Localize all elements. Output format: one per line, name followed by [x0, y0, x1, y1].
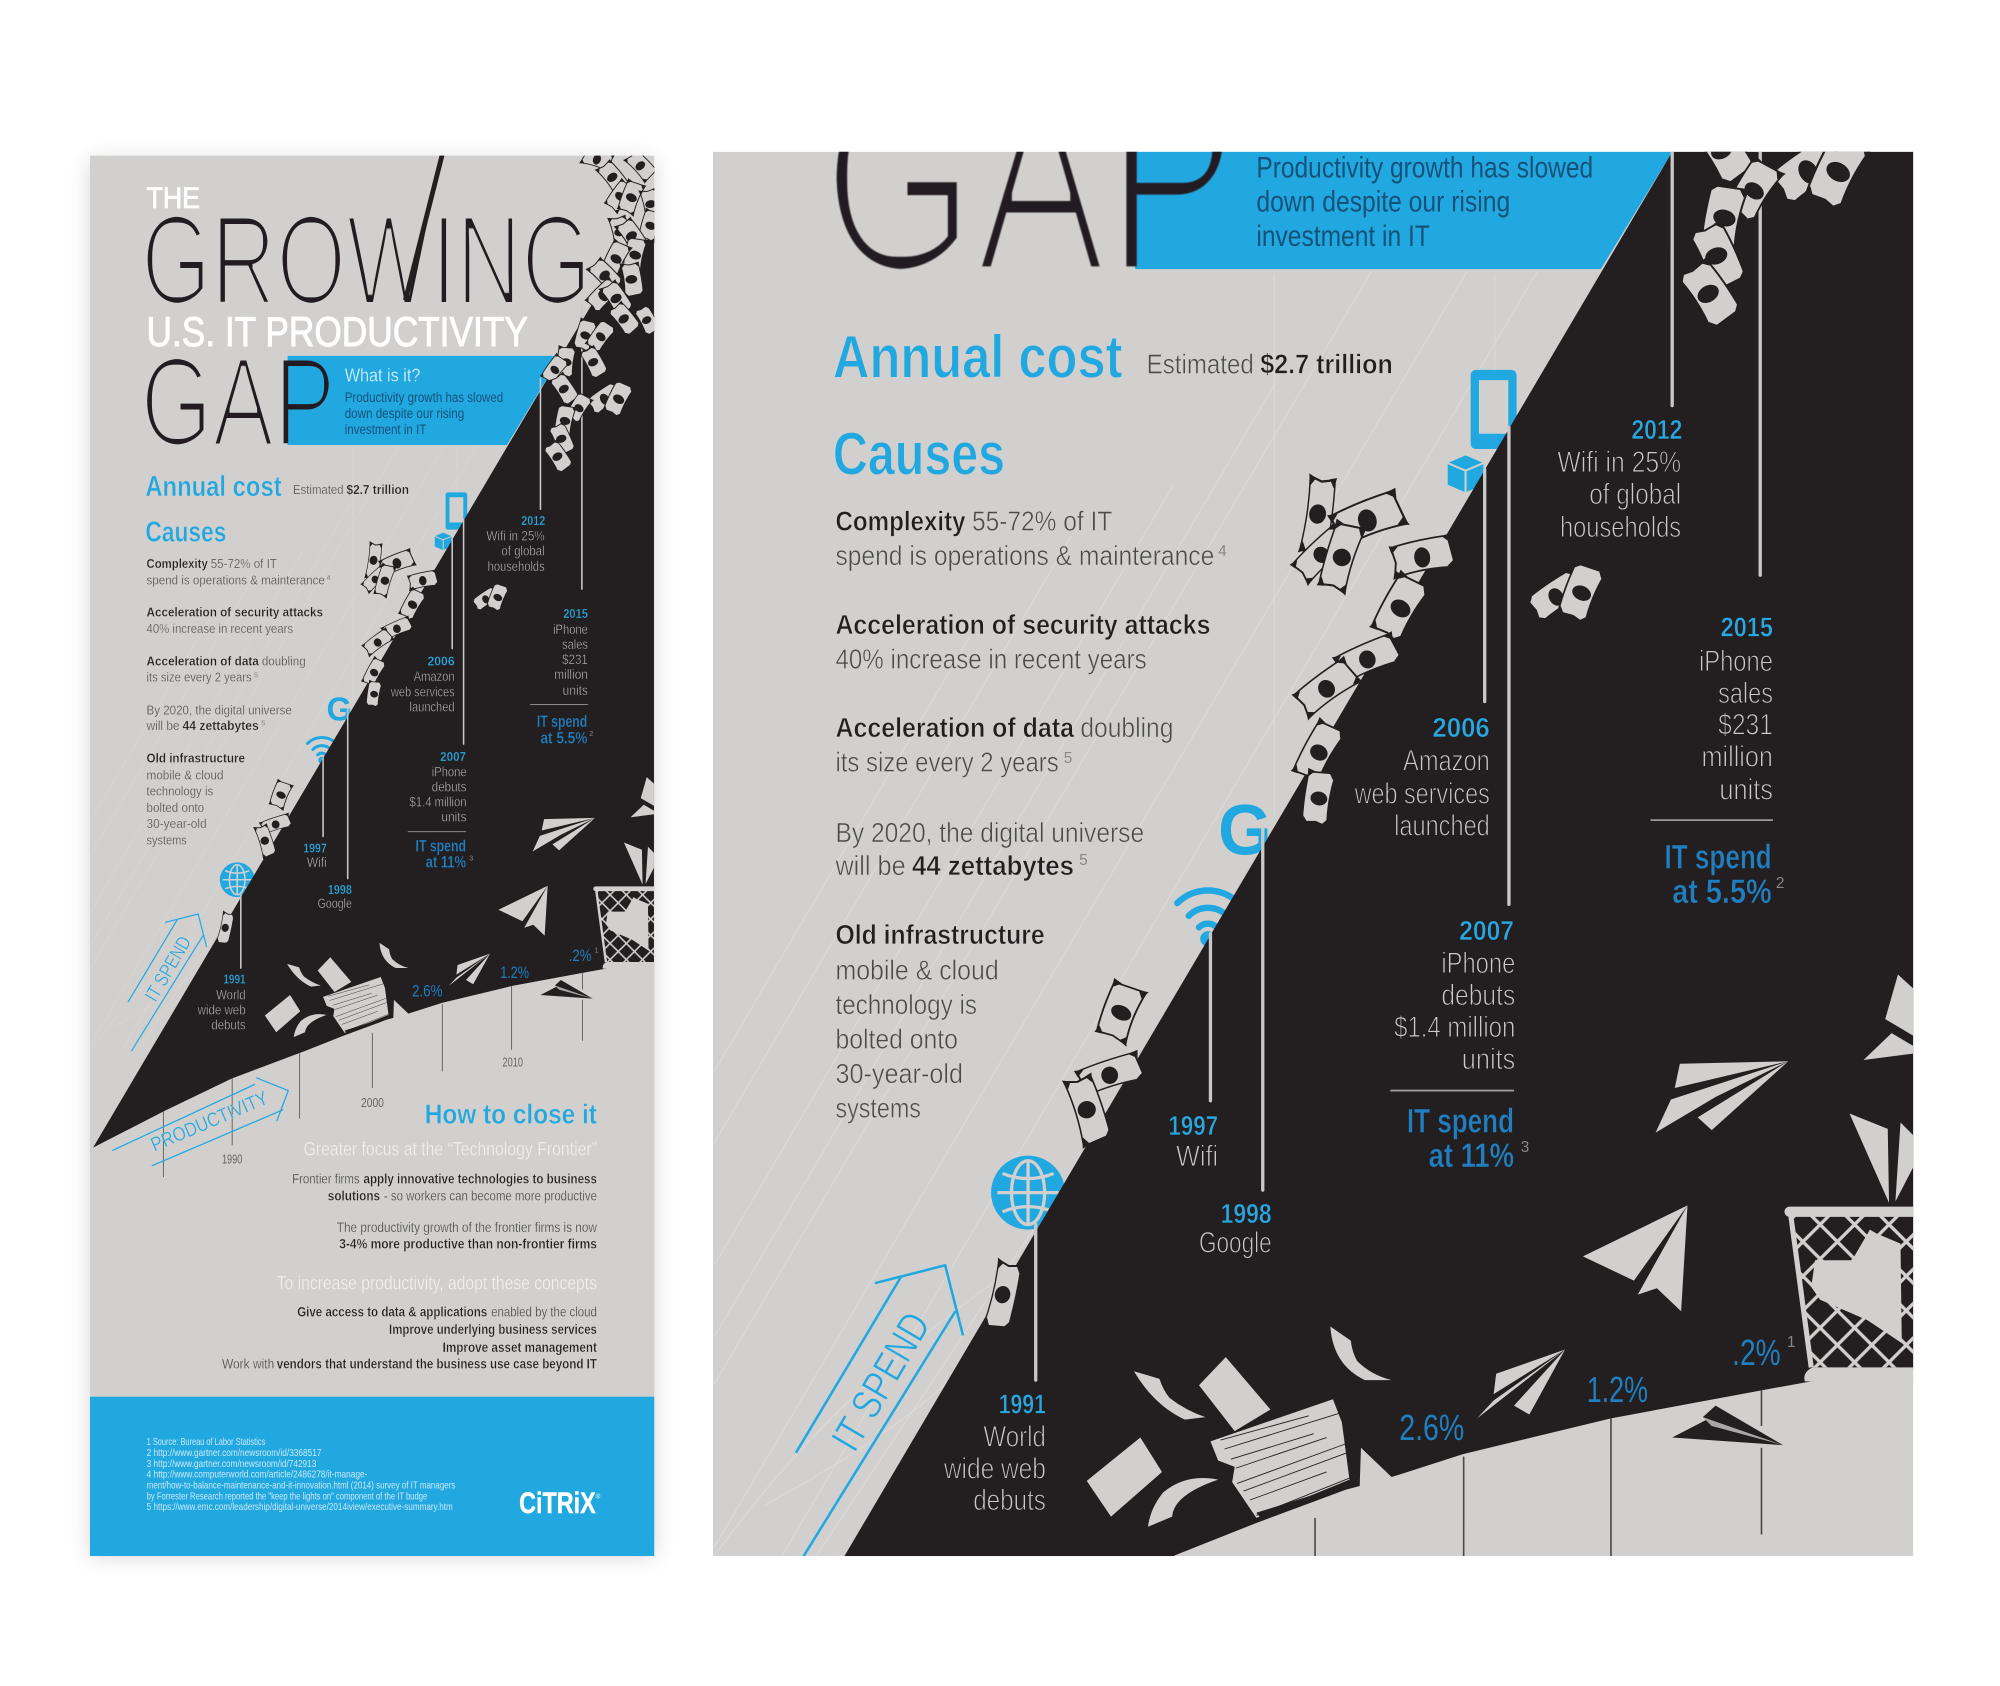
- cause: complexity: [147, 556, 331, 587]
- icon: globe: [991, 1156, 1065, 1230]
- annual cost value: Estimated: [293, 482, 343, 497]
- Citrix logo: ®: [596, 1493, 601, 1501]
- footnotes: 2 http://www.gartner.com/newsroom/id/3368517: [147, 1448, 321, 1459]
- milestone 2007: $1.4 million: [1394, 1011, 1515, 1044]
- panel shadow: full infographic: [90, 161, 654, 1556]
- milestone 2015: sales: [1718, 677, 1773, 710]
- how to close it heading: How to close it: [425, 1099, 597, 1130]
- cause: complexity: 55-72% of IT: [211, 556, 277, 571]
- axis year 2010: 2010: [503, 1054, 523, 1069]
- milestone 2007: units: [441, 809, 467, 825]
- icon: wifi: [307, 737, 336, 762]
- paper airplane 1: [1656, 1061, 1788, 1133]
- milestone 2007: iPhone: [432, 763, 467, 779]
- milestone 2006: launched: [410, 699, 455, 715]
- icon: cube: [1448, 455, 1483, 492]
- productivity 1.2%: 1.2%: [500, 963, 529, 982]
- panel: full infographic poster: [89, 144, 665, 1556]
- milestone 2015: units: [1719, 774, 1773, 807]
- milestone 2006: 2006: [428, 653, 455, 668]
- milestone 1991: World: [983, 1420, 1046, 1453]
- productivity .2%: 1: [595, 945, 599, 954]
- cause: old infrastructure: bolted onto: [835, 1023, 958, 1054]
- cause: old infrastructure: systems: [147, 832, 187, 847]
- IT spend 11%: at 11%: [426, 854, 466, 872]
- productivity growth paragraph: 3-4% more productive than non-frontier firms: [339, 1237, 597, 1252]
- milestone 2015: 2015: [1721, 611, 1773, 642]
- productivity ticks: [163, 973, 582, 1177]
- paper stack and loose sheets: [1087, 1327, 1392, 1527]
- cause: digital universe: [835, 817, 1144, 881]
- annual cost value: $2.7 trillion: [346, 482, 409, 497]
- wastepaper basket: [1790, 1212, 1913, 1381]
- icon: cube: [435, 533, 452, 550]
- paper airplane 5: [631, 777, 654, 817]
- cause: data: its size every 2 years: [147, 670, 252, 685]
- milestone 2015: iPhone: [1699, 645, 1773, 678]
- footnotes: 3 http://www.gartner.com/newsroom/id/742913: [147, 1459, 316, 1470]
- cause: complexity: Complexity: [835, 506, 966, 537]
- what is it body: investment in IT: [345, 421, 427, 437]
- paper airplane 5: [1864, 975, 1913, 1060]
- milestone 1997: [1168, 1110, 1218, 1173]
- milestone 2012: 2012: [1631, 414, 1682, 445]
- what is it body: Productivity growth has slowed: [1256, 151, 1593, 184]
- paper airplane 3: [449, 954, 490, 986]
- milestone 1991: debuts: [973, 1484, 1046, 1517]
- cause: digital universe: By 2020, the digital universe: [835, 817, 1144, 848]
- footnotes: ment/how-to-balance-maintenance-and-it-innovation.html (2014) survey of IT managers: [147, 1481, 455, 1492]
- what is it body: Productivity growth has slowed: [345, 389, 503, 405]
- milestone 2015: million: [554, 666, 588, 682]
- paper airplane 2: [498, 886, 548, 936]
- IT spend 5.5%: [530, 704, 593, 747]
- milestone 1998: 1998: [328, 882, 352, 897]
- milestone 2007: $1.4 million: [410, 794, 467, 810]
- cause: data: [147, 653, 306, 685]
- productivity ticks: [1315, 1390, 1761, 1556]
- footer band: [90, 1397, 654, 1556]
- what-is-it blue banner: [288, 356, 561, 445]
- cause: old infrastructure: mobile & cloud: [147, 767, 223, 782]
- paper airplane 4: [540, 980, 593, 999]
- cause: data: doubling: [262, 653, 306, 668]
- annual cost value: [1147, 349, 1393, 380]
- productivity .2%: .2%: [1732, 1333, 1781, 1373]
- milestone 2007: 2007: [1459, 915, 1514, 946]
- cause: complexity: [835, 506, 1227, 571]
- timeline stems: [1036, 0, 1760, 1380]
- IT spend 11%: [408, 832, 473, 872]
- frontier firms paragraph: - so workers can become more productive: [384, 1188, 597, 1203]
- cause: old infrastructure: Old infrastructure: [835, 919, 1045, 950]
- frontier firms paragraph: [292, 1172, 597, 1203]
- milestone 1991: debuts: [211, 1016, 246, 1032]
- milestone 2015: [1699, 611, 1773, 807]
- annual cost value: $2.7 trillion: [1260, 349, 1393, 380]
- detail grey background: [713, 152, 1913, 1556]
- money bills on black: [1522, 0, 1937, 627]
- cause: old infrastructure: [147, 751, 245, 847]
- cause: security attacks: [835, 609, 1210, 674]
- productivity growth paragraph: [337, 1220, 597, 1252]
- cause: security attacks: Acceleration of security attacks: [147, 605, 323, 620]
- frontier firms paragraph: apply innovative technologies to business: [364, 1172, 597, 1187]
- cause: digital universe: 5: [1079, 852, 1088, 869]
- milestone 2007: iPhone: [1441, 947, 1515, 980]
- money bills on black: [470, 144, 665, 613]
- paper airplane 2: [1583, 1205, 1688, 1311]
- milestone 2015: sales: [562, 636, 588, 652]
- cause: digital universe: 44 zettabytes: [183, 718, 259, 733]
- milestone 1991: 1991: [223, 972, 246, 987]
- panel: zoomed detail view: [713, 0, 1937, 1556]
- milestone 1997: Wifi: [1176, 1140, 1218, 1173]
- milestone 1998: Google: [318, 895, 352, 911]
- concepts list: enabled by the cloud: [491, 1304, 597, 1319]
- cause: complexity: 4: [1218, 543, 1227, 560]
- annual cost heading: Annual cost: [145, 470, 282, 502]
- milestone 2012: Wifi in 25%: [1557, 446, 1681, 479]
- footnotes: [147, 1437, 455, 1513]
- productivity 1.2%: 1.2%: [1587, 1370, 1648, 1410]
- paper airplane 6: [624, 843, 654, 885]
- cause: digital universe: By 2020, the digital universe: [147, 703, 292, 718]
- infographic: the growing U.S. IT productivity gap: [81, 152, 1914, 1565]
- milestone 2006: [390, 653, 455, 715]
- black gap wedge: [93, 233, 654, 1148]
- milestone 2006: web services: [1354, 778, 1490, 811]
- milestone 1997: 1997: [1168, 1110, 1218, 1141]
- what-is-it blue banner: [1135, 152, 1672, 269]
- cause: complexity: spend is operations & mainterance: [147, 572, 325, 587]
- what is it body: investment in IT: [1256, 220, 1430, 253]
- milestone 2012: of global: [1589, 478, 1681, 511]
- title: GAP: GAP: [141, 332, 336, 473]
- milestone 2007: debuts: [432, 778, 467, 794]
- paper airplane 4: [1672, 1406, 1783, 1445]
- IT spend 11%: 3: [1521, 1139, 1529, 1156]
- cause: old infrastructure: Old infrastructure: [147, 751, 245, 766]
- cause: data: 5: [254, 670, 258, 679]
- cause: data: doubling: [1080, 712, 1173, 743]
- milestone 2015: [553, 606, 588, 698]
- frontier firms paragraph: Frontier firms: [292, 1172, 360, 1187]
- what is it body: [345, 392, 502, 434]
- IT spend 5.5%: 2: [1776, 875, 1784, 892]
- productivity .2%: .2%: [569, 946, 592, 965]
- icon: globe: [220, 862, 255, 897]
- cause: old infrastructure: bolted onto: [147, 800, 204, 815]
- black gap wedge: [844, 152, 1913, 1556]
- cause: data: Acceleration of data: [835, 712, 1074, 743]
- IT spend 11%: IT spend: [1407, 1103, 1514, 1141]
- IT spend 5.5%: [1651, 820, 1784, 911]
- cause: old infrastructure: mobile & cloud: [835, 955, 999, 986]
- concepts list: Improve asset management: [443, 1340, 597, 1355]
- milestone 2006: web services: [390, 684, 455, 700]
- paper airplane 3: [1477, 1350, 1565, 1418]
- causes heading: Causes: [145, 516, 226, 548]
- milestone 1997: [303, 841, 327, 870]
- icon: Google G: G: [327, 692, 352, 729]
- cause: digital universe: will be: [835, 850, 906, 881]
- footnotes: by Forrester Research reported the "keep the lights on" component of the IT budge: [147, 1491, 427, 1502]
- milestone 2015: 2015: [563, 606, 588, 621]
- title: THE: THE: [147, 182, 200, 215]
- paper airplane 1: [533, 818, 595, 852]
- annual cost value: Estimated: [1147, 349, 1254, 380]
- cause: old infrastructure: systems: [835, 1092, 921, 1123]
- timeline stems: [241, 303, 582, 968]
- concepts list: Give access to data & applications: [297, 1304, 487, 1319]
- cause: old infrastructure: technology is: [835, 989, 977, 1020]
- poster grey background: [90, 156, 654, 1556]
- milestone 2006: launched: [1394, 809, 1490, 842]
- milestone 2015: $231: [1718, 709, 1773, 742]
- cause: security attacks: Acceleration of security attacks: [835, 609, 1210, 640]
- IT spend arrow: [128, 914, 207, 1051]
- concepts list: [222, 1304, 598, 1372]
- paper airplane 6: [1849, 1114, 1913, 1203]
- title: GAP cropped: GAP: [823, 28, 1237, 327]
- cause: digital universe: will be: [146, 718, 180, 733]
- milestone 1998: 1998: [1221, 1198, 1272, 1229]
- IT spend arrow: [796, 1265, 963, 1556]
- axis year 2000: 2000: [361, 1095, 384, 1110]
- IT spend 5.5%: 2: [589, 729, 593, 738]
- IT spend label: IT SPEND: [141, 933, 196, 1005]
- IT spend 11%: at 11%: [1429, 1137, 1514, 1175]
- icon: wifi: [1177, 890, 1239, 943]
- IT spend 11%: 3: [469, 854, 473, 863]
- milestone 2006: [1354, 712, 1490, 842]
- annual cost value: [294, 484, 408, 496]
- milestone 1991: wide web: [197, 1001, 246, 1017]
- title: U.S. IT PRODUCTIVITY: U.S. IT PRODUCTIVITY: [147, 308, 528, 355]
- productivity 2.6%: 2.6%: [412, 981, 443, 1000]
- cause: old infrastructure: 30-year-old: [835, 1058, 963, 1089]
- milestone 2012: Wifi in 25%: [486, 527, 545, 543]
- milestone 1998: [1199, 1198, 1272, 1260]
- milestone 2015: $231: [562, 651, 588, 667]
- milestone 1997: 1997: [303, 841, 327, 856]
- IT spend label: IT SPEND: [822, 1304, 939, 1459]
- frontier firms paragraph: solutions: [328, 1188, 380, 1203]
- milestone 1991: [943, 1388, 1046, 1517]
- cause: old infrastructure: 30-year-old: [147, 816, 207, 831]
- milestone 2012: [486, 513, 545, 574]
- milestone 2012: of global: [501, 542, 545, 558]
- milestone 2006: Amazon: [1403, 744, 1490, 777]
- milestone 1991: wide web: [943, 1452, 1046, 1485]
- milestone 2012: households: [1560, 511, 1681, 544]
- milestone 2006: Amazon: [414, 668, 455, 684]
- concepts list: Improve underlying business services: [389, 1322, 597, 1337]
- poster artwork scaled from the detail view: [89, 144, 665, 1177]
- productivity arrow: [112, 1078, 288, 1166]
- technology frontier subheading: Greater focus at the “Technology Frontier”: [304, 1140, 597, 1161]
- IT spend 5.5%: at 5.5%: [1672, 873, 1772, 911]
- icon: phone: [1471, 370, 1517, 449]
- wastepaper basket: [596, 889, 654, 969]
- milestone 2006: 2006: [1432, 712, 1490, 743]
- IT spend 5.5%: IT spend: [537, 713, 587, 731]
- cause: complexity: spend is operations & mainterance: [835, 540, 1214, 571]
- cause: digital universe: 44 zettabytes: [912, 850, 1074, 881]
- footnotes: 1 Source: Bureau of Labor Statistics: [147, 1437, 265, 1448]
- cause: data: [835, 712, 1173, 778]
- milestone 1991: 1991: [999, 1388, 1046, 1419]
- milestone 2012: households: [488, 558, 545, 574]
- paper stack and loose sheets: [265, 943, 408, 1037]
- milestone 2015: iPhone: [553, 621, 588, 637]
- cause: complexity: 55-72% of IT: [972, 506, 1112, 537]
- milestone 1991: [197, 972, 246, 1032]
- milestone 2015: million: [1702, 741, 1773, 774]
- concepts list: vendors that understand the business use case beyond IT: [277, 1357, 598, 1372]
- cause: security attacks: [147, 605, 323, 636]
- cause: digital universe: 5: [261, 718, 265, 727]
- productivity growth paragraph: The productivity growth of the frontier firms is now: [337, 1220, 597, 1235]
- footnotes: 4 http://www.computerworld.com/article/2486278/it-manage-: [147, 1470, 367, 1481]
- milestone 2012: 2012: [521, 513, 545, 528]
- cause: old infrastructure: [835, 919, 1045, 1123]
- what is it heading: What is it?: [345, 365, 420, 385]
- cause: security attacks: 40% increase in recent years: [835, 643, 1147, 674]
- title W extended stroke: [405, 153, 443, 300]
- icon: Google G: G: [1218, 791, 1272, 871]
- cause: old infrastructure: technology is: [147, 784, 214, 799]
- icon: phone: [446, 492, 467, 530]
- milestone 1998: Google: [1199, 1227, 1272, 1260]
- milestone 2007: 2007: [440, 749, 466, 764]
- cause: data: 5: [1064, 750, 1072, 767]
- milestone 2012: [1557, 414, 1682, 544]
- annual cost heading: Annual cost: [833, 324, 1122, 391]
- Citrix logo: CiTRiX: [519, 1487, 596, 1520]
- concepts list: Work with: [222, 1357, 274, 1372]
- cause: complexity: Complexity: [147, 556, 208, 571]
- IT spend 5.5%: at 5.5%: [540, 729, 587, 747]
- money bills on grey: [214, 541, 440, 946]
- milestone 2007: [1394, 915, 1515, 1076]
- footnotes: 5 https://www.emc.com/leadership/digital-universe/2014iview/executive-summary.htm: [147, 1502, 453, 1513]
- what is it body: down despite our rising: [1256, 186, 1510, 219]
- milestone 2007: [410, 749, 467, 825]
- IT spend 11%: IT spend: [416, 838, 466, 856]
- causes heading: Causes: [833, 421, 1005, 488]
- productivity 2.6%: 2.6%: [1399, 1408, 1464, 1448]
- money bills on grey: [979, 473, 1458, 1334]
- cause: complexity: 4: [327, 573, 331, 582]
- cause: data: its size every 2 years: [835, 747, 1059, 778]
- IT spend 5.5%: IT spend: [1665, 839, 1772, 877]
- milestone 1991: World: [216, 986, 246, 1002]
- IT spend 11%: [1390, 1091, 1529, 1175]
- milestone 2007: debuts: [1441, 979, 1515, 1012]
- cause: digital universe: [146, 703, 292, 733]
- milestone 1997: Wifi: [307, 854, 327, 870]
- what is it body: [1256, 151, 1593, 253]
- axis year 1990: 1990: [222, 1151, 242, 1166]
- productivity .2%: 1: [1787, 1334, 1796, 1351]
- adopt these concepts subheading: To increase productivity, adopt these concepts: [277, 1274, 597, 1295]
- cause: data: Acceleration of data: [147, 653, 259, 668]
- title: GROWING: GROWING: [141, 189, 592, 331]
- what is it body: down despite our rising: [345, 405, 464, 421]
- productivity label: PRODUCTIVITY: [148, 1087, 271, 1156]
- cause: security attacks: 40% increase in recent years: [147, 621, 293, 636]
- milestone 2015: units: [563, 682, 588, 698]
- milestone 2007: units: [1462, 1043, 1515, 1076]
- milestone 1998: [318, 882, 352, 911]
